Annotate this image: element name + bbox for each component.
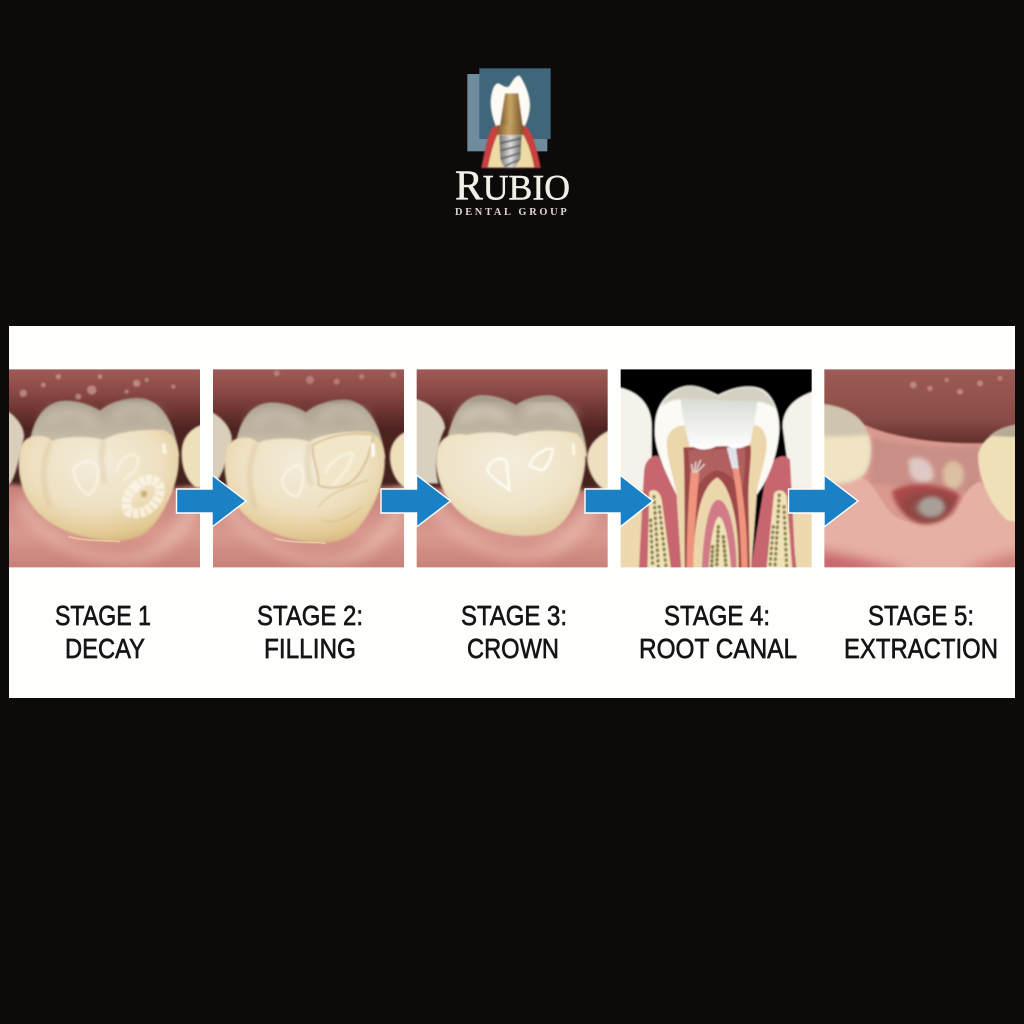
white stages panel [2, 326, 1022, 698]
speckles on lip [274, 370, 396, 385]
logo implant tooth icon [481, 76, 541, 168]
lower gum ridge [824, 478, 1015, 568]
label: stage 1 [55, 600, 151, 664]
label: stage 4: ROOT CANAL [639, 633, 797, 664]
arrow: stage 2 to 3 [381, 475, 450, 527]
label: stage 4: STAGE 4: [664, 600, 770, 631]
speckles on lip [20, 374, 175, 400]
label: stage 4 [639, 600, 797, 664]
remaining left tooth [818, 403, 871, 483]
gums [639, 456, 796, 574]
stage 3 photo: crown [416, 369, 608, 568]
arrow: stage 3 to 4 [585, 475, 653, 527]
gum rim [430, 497, 597, 560]
arrow: stage 4 to 5 [788, 475, 858, 527]
arrow: stage 1 to 2 [176, 475, 246, 527]
label: stage 5: STAGE 5: [868, 600, 974, 631]
neighbouring teeth [410, 398, 614, 491]
label: stage 3: STAGE 3: [461, 600, 567, 631]
pulp chamber and canals [683, 445, 751, 574]
speckles on lip [910, 376, 1002, 395]
label: stage 5: EXTRACTION [844, 633, 998, 664]
tooth enamel [655, 386, 779, 574]
socket [892, 484, 960, 524]
logo: Rubio Dental Group [455, 68, 570, 218]
stage 4 illustration: root canal [620, 369, 812, 568]
extraction site tissue [870, 437, 980, 493]
label: stage 5 [844, 600, 998, 664]
label: stage 3: CROWN [467, 633, 559, 664]
crown highlights [487, 443, 574, 490]
stage 5 photo: extraction [824, 369, 1015, 568]
upper lip [824, 369, 1015, 444]
label: stage 3 [461, 600, 567, 664]
label: stage 1: DECAY [65, 633, 145, 664]
crown body [436, 395, 587, 536]
logo back squares [467, 68, 551, 151]
logo wordmark: RUBIO [455, 163, 570, 209]
label: stage 2: STAGE 2: [257, 600, 363, 631]
label: stage 1: STAGE 1 [55, 600, 151, 631]
label: stage 2: FILLING [264, 633, 356, 664]
stage 1 photo: decay [9, 369, 200, 568]
occlusal surface [661, 386, 775, 408]
stage 2 photo: filling [213, 369, 404, 568]
enamel white spots and decay lesion [73, 443, 165, 513]
dentin [667, 425, 767, 574]
jaw bone with speckles [647, 490, 793, 574]
label: stage 2 [257, 600, 363, 664]
remaining right tooth [977, 428, 1015, 522]
neighbouring teeth [206, 410, 411, 487]
root canal fillings [687, 447, 747, 574]
furcation bone [702, 500, 737, 574]
infographic canvas [9, 68, 1015, 698]
filling outline and highlights [282, 434, 373, 521]
logo tagline: DENTAL GROUP [455, 207, 567, 218]
neighbouring teeth [614, 387, 818, 574]
white restoration [681, 399, 757, 449]
neighbouring teeth [2, 408, 207, 487]
